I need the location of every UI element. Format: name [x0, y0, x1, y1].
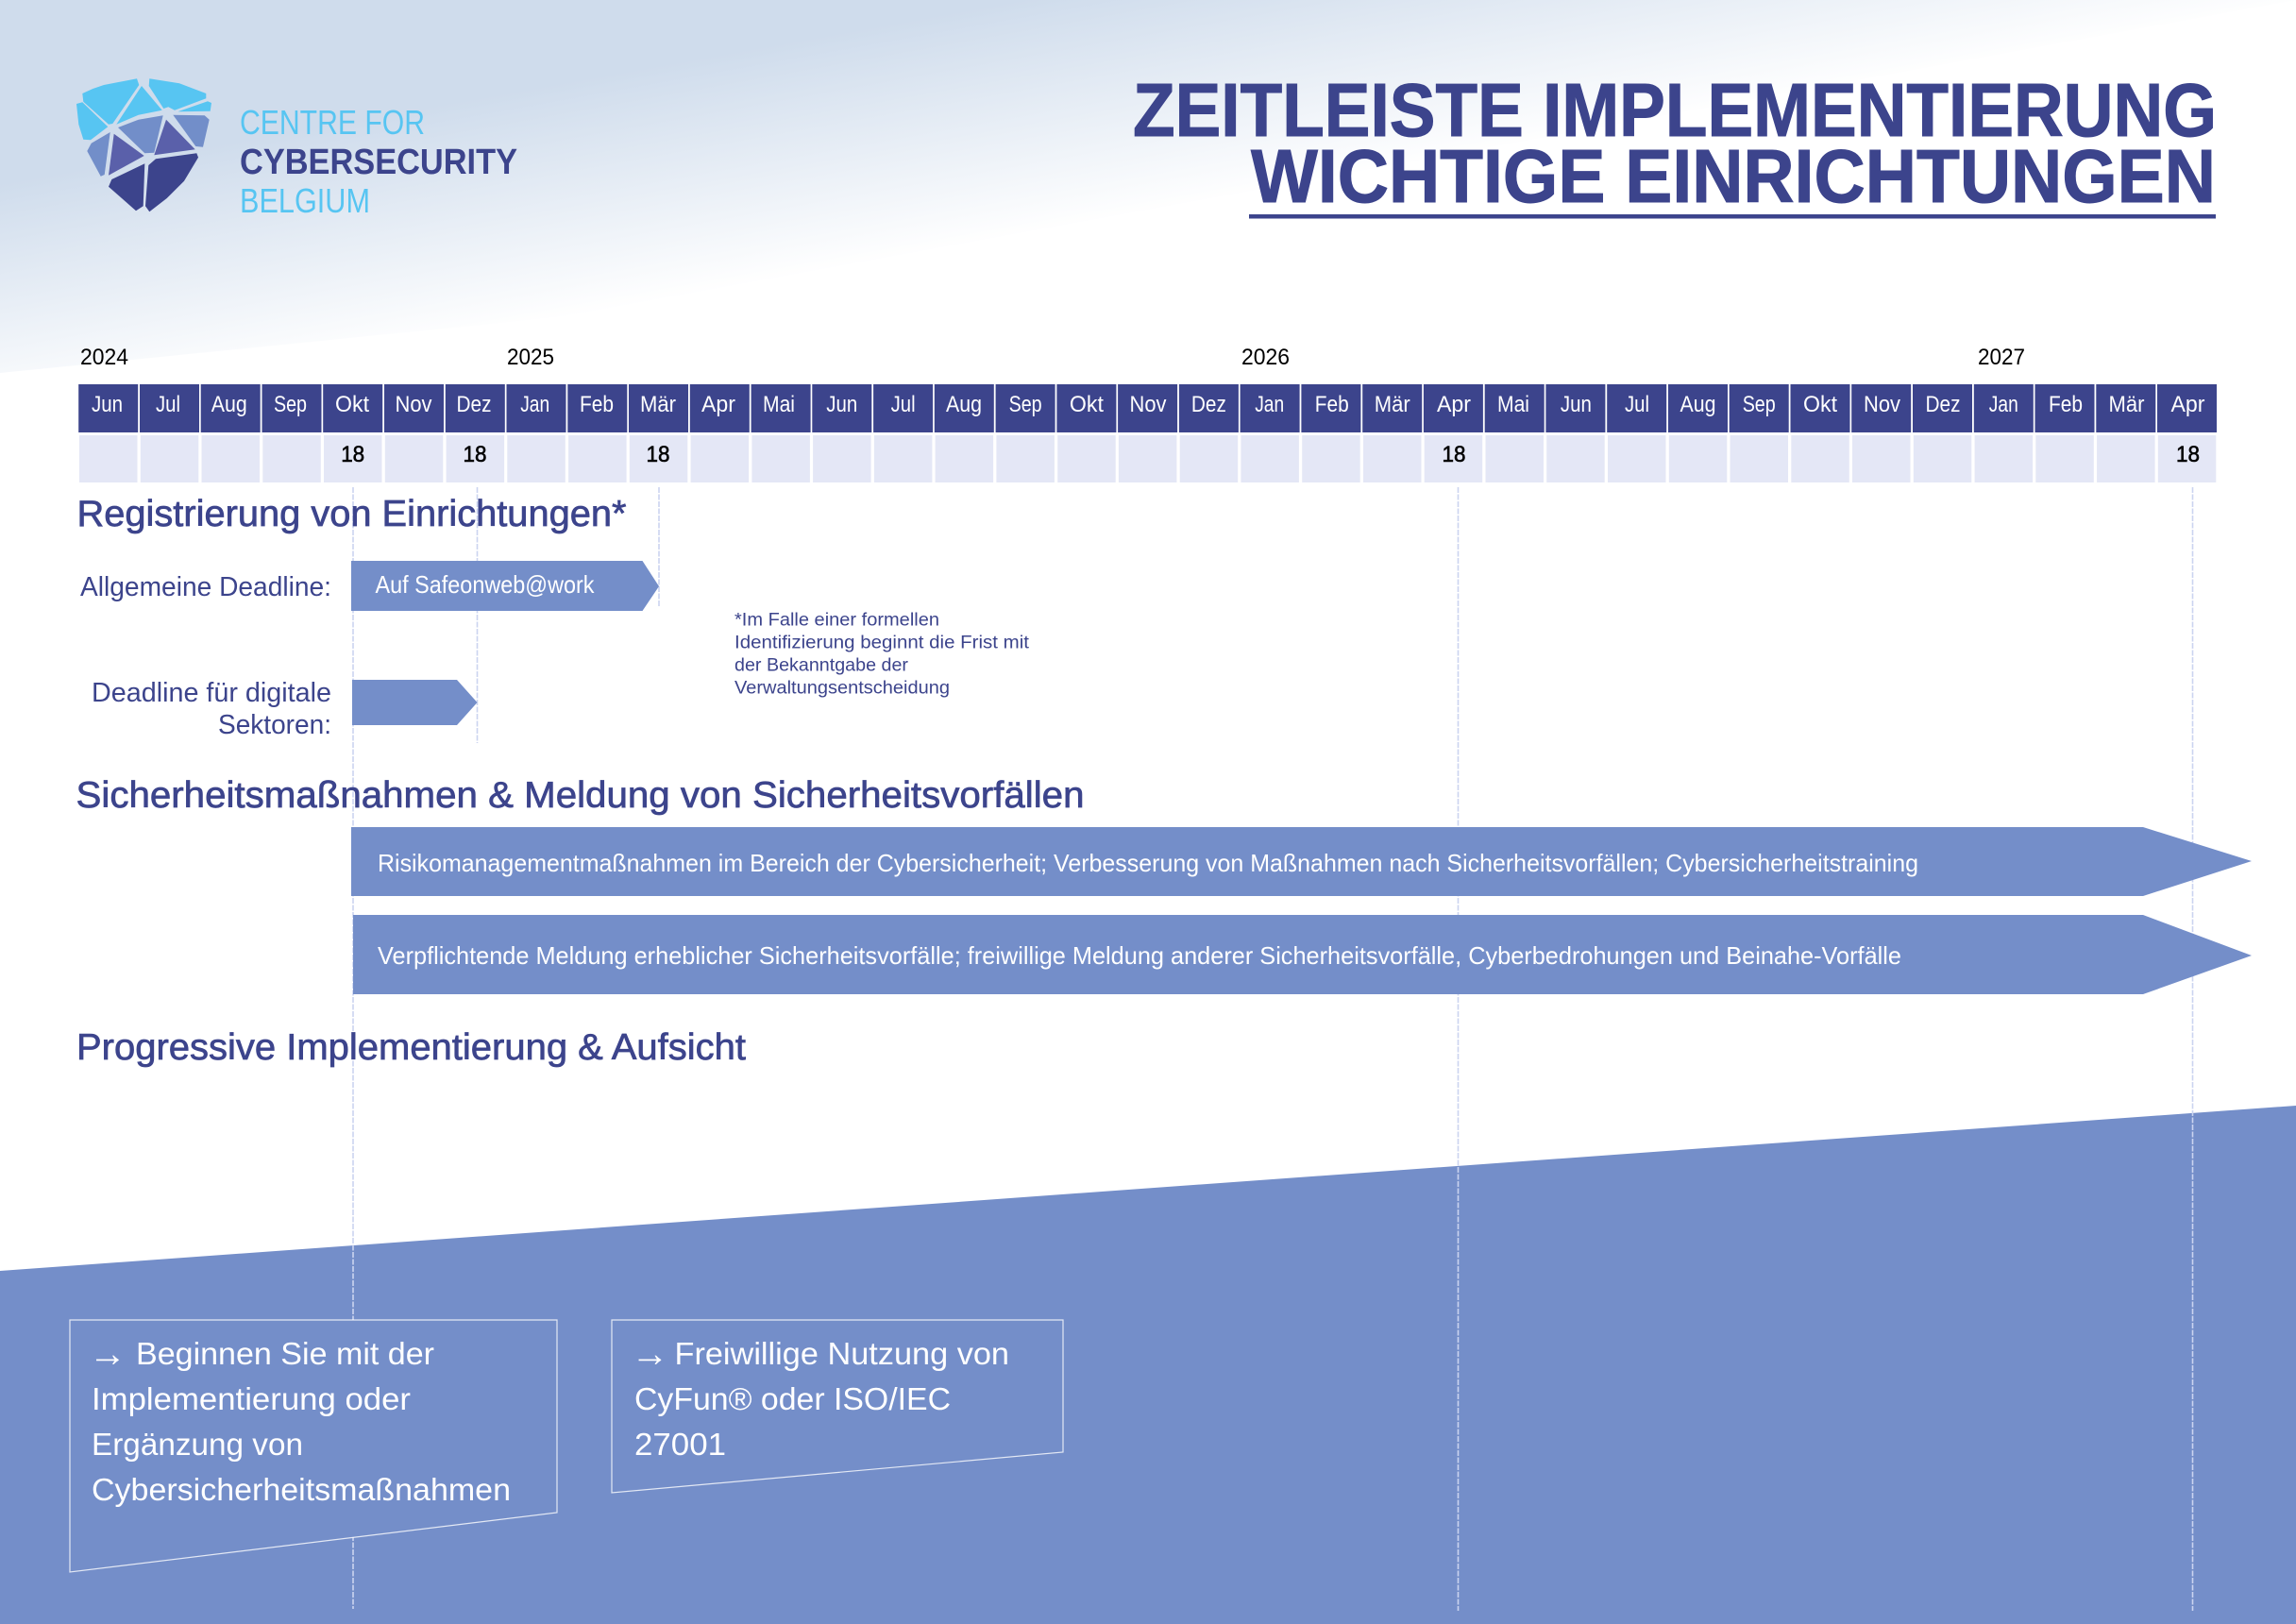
dashed deadline guide lines	[353, 487, 2192, 1611]
month header row: Aug	[211, 392, 247, 417]
month header row: Mai	[763, 392, 795, 417]
month header row: Jul	[156, 392, 180, 417]
date row: 18	[463, 442, 487, 467]
background gradient wedge	[0, 0, 2296, 373]
month header row: Mär	[2109, 392, 2145, 417]
year labels: 2027	[1978, 345, 2025, 370]
callout: begin implementation: Cybersicherheitsmaßnahmen	[92, 1472, 511, 1507]
date row: 18	[646, 442, 670, 467]
month header row: Jul	[1625, 392, 1649, 417]
year labels: 2024	[80, 345, 128, 370]
month header row: Sep	[274, 392, 307, 417]
month header row: Apr	[701, 392, 735, 417]
logo: Centre for Cybersecurity Belgium	[76, 78, 517, 220]
month header row: Jan	[520, 392, 549, 417]
month header row: Apr	[2171, 392, 2205, 417]
month header row: Okt	[1070, 392, 1104, 417]
month header row: Dez	[457, 392, 491, 417]
logo wordmark: CENTRE FOR	[240, 103, 425, 142]
month header row: Nov	[395, 392, 432, 417]
arrow: general deadline: Auf Safeonweb@work	[376, 570, 595, 599]
callout: voluntary use of CyFun or ISO: 27001	[634, 1427, 726, 1462]
label: digital sectors deadline: Sektoren:	[218, 710, 331, 740]
month header row: Feb	[2049, 392, 2083, 417]
heading: registration: Registrierung von Einrichtungen*	[77, 494, 627, 534]
month header row: Nov	[1864, 392, 1900, 417]
month header row: Jun	[826, 392, 857, 417]
footnote: der Bekanntgabe der	[734, 655, 909, 676]
arrow: digital sectors deadline	[352, 680, 478, 725]
month header row: Dez	[1191, 392, 1226, 417]
footnote	[734, 610, 1030, 699]
label: digital sectors deadline	[92, 678, 331, 740]
arrow: incident reporting: Verpflichtende Meldung erheblicher Sicherheitsvorfälle; freiwillige Meldung anderer Sicherheitsvorfälle, Cyberbedrohungen und Beinahe-Vorfälle	[378, 941, 1901, 970]
month header row: Aug	[1680, 392, 1716, 417]
logo wordmark: BELGIUM	[240, 181, 370, 220]
month header row: Aug	[946, 392, 982, 417]
month header row: Okt	[1803, 392, 1837, 417]
icon: shield	[76, 78, 211, 211]
month header row: Nov	[1129, 392, 1167, 417]
year labels: 2026	[1241, 345, 1290, 370]
arrow: risk management measures	[351, 827, 2252, 896]
title: WICHTIGE EINRICHTUNGEN	[1251, 134, 2216, 218]
month header row: Jul	[891, 392, 916, 417]
year labels	[80, 345, 2025, 370]
footnote: Verwaltungsentscheidung	[734, 678, 950, 699]
month header row: Sep	[1743, 392, 1776, 417]
heading: security measures: Sicherheitsmaßnahmen & Meldung von Sicherheitsvorfällen	[76, 775, 1084, 816]
title: ZEITLEISTE IMPLEMENTIERUNG	[1133, 68, 2217, 152]
callout: voluntary use of CyFun or ISO: Freiwillige Nutzung von	[674, 1336, 1009, 1371]
month header row: Jan	[1255, 392, 1284, 417]
month header row: Okt	[335, 392, 369, 417]
month header row: Feb	[1315, 392, 1349, 417]
month header row: Mär	[640, 392, 676, 417]
callout: voluntary use of CyFun or ISO: →	[631, 1333, 668, 1375]
arrow: general deadline	[351, 561, 659, 611]
month header row: Mär	[1375, 392, 1410, 417]
logo wordmark	[240, 103, 517, 220]
date row: 18	[1443, 442, 1465, 467]
date row: 18	[2176, 442, 2200, 467]
logo wordmark: CYBERSECURITY	[240, 143, 517, 182]
callout: voluntary use of CyFun or ISO: CyFun® oder ISO/IEC	[634, 1381, 951, 1416]
month header row: Mai	[1497, 392, 1529, 417]
callout: begin implementation	[70, 1320, 557, 1572]
month header row: Jun	[1561, 392, 1592, 417]
month header row: Jan	[1989, 392, 2018, 417]
callout: begin implementation: Ergänzung von	[92, 1427, 303, 1462]
footnote: Identifizierung beginnt die Frist mit	[734, 633, 1030, 653]
label: digital sectors deadline: Deadline für digitale	[92, 678, 331, 708]
month header row: Apr	[1437, 392, 1471, 417]
callout: begin implementation: →	[89, 1333, 127, 1375]
arrow: incident reporting	[353, 915, 2252, 994]
arrow: risk management measures: Risikomanagementmaßnahmen im Bereich der Cybersicherheit; Verbesserung von Maßnahmen nach Sicherheitsvorfällen; Cybersicherheitstraining	[378, 849, 1918, 877]
date row	[79, 435, 2216, 482]
label: general deadline: Allgemeine Deadline:	[80, 572, 331, 602]
month header row: Jun	[92, 392, 123, 417]
month header row	[78, 384, 2217, 432]
callout: begin implementation: Beginnen Sie mit der	[136, 1336, 434, 1371]
year labels: 2025	[507, 345, 554, 370]
date row: 18	[341, 442, 364, 467]
footnote: *Im Falle einer formellen	[734, 610, 939, 631]
month header row: Dez	[1926, 392, 1960, 417]
month header row: Feb	[580, 392, 614, 417]
title	[1133, 68, 2217, 219]
callout: voluntary use of CyFun or ISO	[612, 1320, 1063, 1493]
callout: begin implementation: Implementierung oder	[92, 1381, 411, 1416]
bottom blue band	[0, 1106, 2296, 1624]
heading: progressive implementation: Progressive Implementierung & Aufsicht	[76, 1027, 746, 1068]
month header row: Sep	[1009, 392, 1042, 417]
